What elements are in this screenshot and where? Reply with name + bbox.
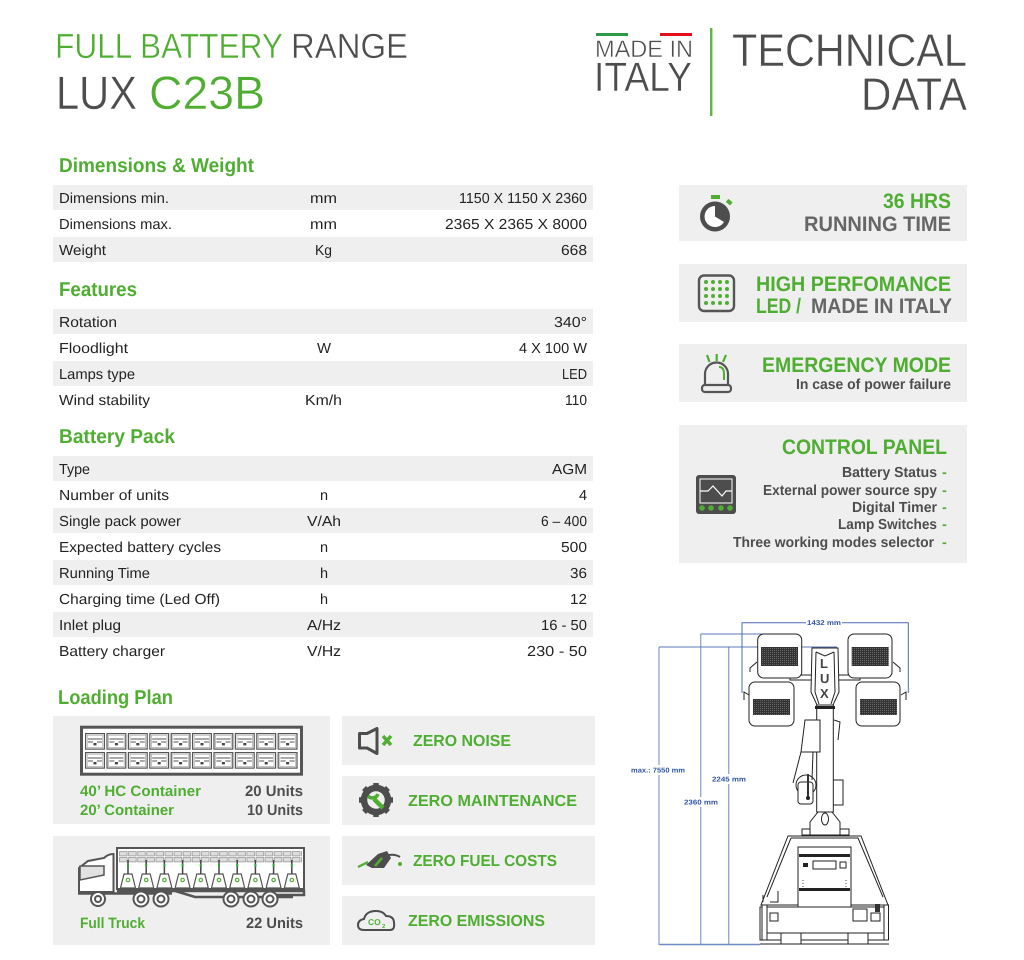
panel: truck loading: Full Truck bbox=[80, 915, 146, 932]
table rows: AGM bbox=[552, 462, 587, 478]
table rows: mm bbox=[310, 217, 337, 233]
table rows bbox=[59, 315, 587, 409]
section: features bbox=[53, 279, 593, 409]
table rows: 340° bbox=[554, 315, 587, 331]
table rows: 4 X 100 W bbox=[519, 341, 587, 357]
dimension labels: 1432 mm bbox=[807, 620, 841, 627]
winch and arm bbox=[793, 720, 843, 805]
title: model name: C23B bbox=[149, 66, 265, 119]
table rows: 12 bbox=[570, 592, 587, 608]
panel: container loading: 20’ Container bbox=[80, 802, 174, 819]
section: dimensions and weight bbox=[53, 155, 593, 262]
panel: control panel: - bbox=[942, 500, 947, 516]
panel: control panel: - bbox=[942, 535, 947, 551]
panel: container loading: 10 Units bbox=[247, 802, 303, 819]
panel: truck loading bbox=[53, 836, 330, 945]
panel: control panel: Lamp Switches bbox=[838, 517, 937, 533]
table rows: 110 bbox=[565, 393, 587, 409]
dimension labels: 2360 mm bbox=[684, 800, 718, 807]
panel: control panel: Battery Status bbox=[842, 465, 937, 481]
mast base bracket bbox=[802, 812, 849, 835]
heading: loading plan: Loading Plan bbox=[58, 687, 173, 709]
table rows: 2365 X 2365 X 8000 bbox=[445, 217, 587, 233]
icon: fuel nozzle bbox=[358, 851, 402, 868]
panel: control panel: - bbox=[942, 465, 947, 481]
title: model name bbox=[56, 66, 265, 119]
mast head with logo: X bbox=[820, 686, 829, 701]
table rows: h bbox=[320, 592, 328, 608]
table rows: n bbox=[320, 540, 328, 556]
table rows: W bbox=[317, 341, 331, 357]
panel: zero fuel costs: ZERO FUEL COSTS bbox=[413, 853, 557, 870]
panel: truck loading: 22 Units bbox=[246, 915, 303, 932]
icon: co2 cloud bbox=[358, 911, 394, 930]
table rows: 16 - 50 bbox=[541, 618, 587, 634]
panel: control panel bbox=[679, 425, 967, 563]
icon: led array bbox=[699, 276, 734, 311]
panel: container loading: 40’ HC Container bbox=[80, 783, 201, 800]
table rows: Kg bbox=[315, 243, 332, 259]
icon: gear and wrench bbox=[359, 783, 393, 817]
panel: control panel: External power source spy bbox=[763, 483, 937, 499]
panel: running time: 36 HRS bbox=[883, 190, 951, 213]
panel: emergency mode bbox=[679, 344, 967, 402]
table rows: Type bbox=[59, 462, 90, 478]
table rows: 668 bbox=[561, 243, 587, 259]
heading: Battery Pack bbox=[59, 426, 176, 448]
table rows: Expected battery cycles bbox=[59, 540, 221, 556]
table rows: V/Hz bbox=[307, 644, 341, 660]
floodlights bbox=[744, 634, 906, 726]
table rows: 4 bbox=[579, 488, 587, 504]
table rows: Running Time bbox=[59, 566, 150, 582]
table rows: 1150 X 1150 X 2360 bbox=[459, 191, 587, 207]
panel: running time: RUNNING TIME bbox=[804, 213, 951, 236]
table rows: Km/h bbox=[305, 393, 342, 409]
panel: container loading: 20 Units bbox=[245, 783, 303, 800]
panel: zero noise bbox=[342, 716, 595, 765]
panel: high performance led: MADE IN ITALY bbox=[811, 295, 952, 318]
table rows: Inlet plug bbox=[59, 618, 121, 634]
table rows: 230 - 50 bbox=[527, 644, 587, 660]
diagram: lighting tower front view bbox=[630, 620, 908, 945]
table rows: Battery charger bbox=[59, 644, 165, 660]
dimension labels: max.: 7550 mm bbox=[631, 768, 685, 774]
trailer body bbox=[761, 836, 888, 907]
icon: co2 cloud: CO bbox=[368, 917, 381, 927]
icon: co2 cloud: 2 bbox=[382, 923, 386, 930]
table rows: Number of units bbox=[59, 488, 169, 504]
icon: beacon light bbox=[702, 354, 731, 392]
table rows: Wind stability bbox=[59, 393, 151, 409]
mast head with logo: U bbox=[820, 671, 829, 686]
table rows: h bbox=[320, 566, 328, 582]
table rows: V/Ah bbox=[307, 514, 341, 530]
panel: running time bbox=[679, 185, 967, 241]
panel: control panel: Digital Timer bbox=[852, 500, 937, 516]
panel: zero noise: ZERO NOISE bbox=[413, 733, 511, 750]
table rows: 36 bbox=[570, 566, 587, 582]
icon: truck bbox=[78, 848, 304, 906]
title: model name: LUX bbox=[56, 66, 137, 119]
table rows: 500 bbox=[561, 540, 587, 556]
table rows: Lamps type bbox=[59, 367, 135, 383]
table rows: Floodlight bbox=[59, 341, 128, 357]
mast head with logo bbox=[811, 648, 839, 709]
table rows: Dimensions max. bbox=[59, 217, 172, 233]
table rows: Charging time (Led Off) bbox=[59, 592, 220, 608]
table rows bbox=[59, 191, 587, 259]
table rows: Single pack power bbox=[59, 514, 181, 530]
panel: control panel: CONTROL PANEL bbox=[782, 436, 947, 459]
panel: high performance led bbox=[679, 264, 967, 322]
table rows: n bbox=[320, 488, 328, 504]
made in italy logo: ITALY bbox=[594, 54, 692, 100]
panel: control panel: - bbox=[942, 517, 947, 533]
mast bbox=[817, 705, 833, 812]
icon: stopwatch bbox=[700, 195, 733, 232]
table rows: A/Hz bbox=[307, 618, 341, 634]
dimension lines bbox=[630, 623, 908, 945]
table rows: 6 – 400 bbox=[541, 514, 587, 530]
heading: Features bbox=[59, 279, 137, 301]
panel: emergency mode: In case of power failure bbox=[796, 377, 951, 393]
dimension labels bbox=[631, 620, 841, 807]
trailer chassis bbox=[760, 891, 889, 944]
table rows bbox=[59, 462, 587, 660]
panel: control panel: Three working modes selector bbox=[733, 535, 934, 551]
heading: technical data bbox=[732, 24, 967, 120]
mast head with logo: L bbox=[820, 656, 828, 671]
section: battery pack bbox=[53, 426, 593, 660]
panel: high performance led: LED / bbox=[756, 295, 801, 318]
table rows: mm bbox=[310, 191, 337, 207]
panel: zero emissions: ZERO EMISSIONS bbox=[408, 913, 545, 930]
dimension labels: 2245 mm bbox=[712, 777, 746, 784]
table rows: Rotation bbox=[59, 315, 117, 331]
heading: technical data: TECHNICAL bbox=[732, 24, 967, 76]
heading: technical data: DATA bbox=[861, 68, 967, 120]
panel: zero maintenance bbox=[342, 776, 595, 825]
panel: high performance led: HIGH PERFOMANCE bbox=[756, 273, 951, 296]
title: full battery range: RANGE bbox=[291, 27, 408, 66]
icon: container bbox=[82, 727, 302, 774]
title: full battery range: FULL BATTERY bbox=[55, 27, 283, 66]
panel: emergency mode: EMERGENCY MODE bbox=[762, 354, 951, 377]
panel: zero maintenance: ZERO MAINTENANCE bbox=[408, 793, 577, 810]
made in italy logo bbox=[594, 33, 693, 100]
icon: muted speaker bbox=[360, 728, 391, 754]
made in italy logo: MADE IN bbox=[595, 36, 693, 63]
panel: zero emissions bbox=[342, 896, 595, 945]
table rows: Dimensions min. bbox=[59, 191, 169, 207]
table rows: LED bbox=[562, 367, 587, 383]
panel: control panel: - bbox=[942, 483, 947, 499]
heading: Dimensions & Weight bbox=[59, 155, 254, 177]
icon: control screen bbox=[696, 475, 736, 514]
panel: container loading bbox=[53, 716, 330, 824]
floodlight arm bbox=[790, 675, 860, 680]
panel: zero fuel costs bbox=[342, 836, 595, 885]
table rows: Weight bbox=[59, 243, 106, 259]
